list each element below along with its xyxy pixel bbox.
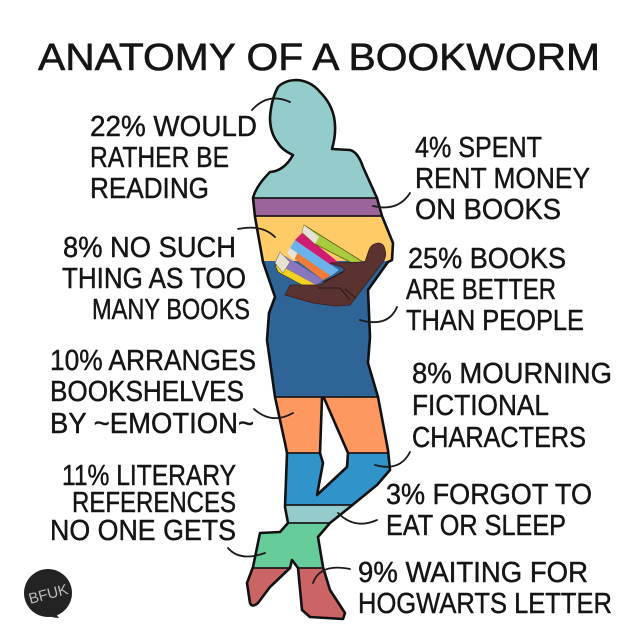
label: 8% mourning fictional characters: CHARACTERS xyxy=(412,422,586,454)
leader lines xyxy=(228,98,410,583)
label: 8% no such thing as too many books: MANY BOOKS xyxy=(92,294,250,326)
label: 10% arranges bookshelves by emotion: BOOKSHELVES xyxy=(50,376,244,408)
label: 9% waiting for hogwarts letter xyxy=(358,557,612,620)
logo: BFUK speech bubble: BFUK xyxy=(27,581,70,608)
label: 22% would rather be reading: READING xyxy=(90,173,209,205)
label: 4% spent rent money on books xyxy=(415,132,590,226)
label: 4% spent rent money on books: 4% SPENT xyxy=(415,132,542,164)
label: 25% books are better than people: ARE BETTER xyxy=(406,274,556,306)
icon: brown arm and hand xyxy=(285,243,386,306)
label: 8% no such thing as too many books xyxy=(62,232,250,326)
logo: BFUK speech bubble xyxy=(24,569,72,618)
label: 22% would rather be reading: RATHER BE xyxy=(90,142,229,174)
label: 11% literary references no one gets: 11% LITERARY xyxy=(62,460,236,492)
label: 9% waiting for hogwarts letter: HOGWARTS LETTER xyxy=(358,588,612,620)
label: 4% spent rent money on books: ON BOOKS xyxy=(415,194,561,226)
label: 10% arranges bookshelves by emotion: 10% ARRANGES xyxy=(50,345,256,377)
label: 25% books are better than people: THAN PEOPLE xyxy=(406,305,584,337)
label: 10% arranges bookshelves by emotion: BY ~EMOTION~ xyxy=(50,408,254,440)
label: 25% books are better than people xyxy=(406,243,584,337)
label: 22% would rather be reading xyxy=(90,111,257,205)
label: 3% forgot to eat or sleep: 3% FORGOT TO xyxy=(386,479,592,511)
label: 10% arranges bookshelves by emotion xyxy=(50,345,256,440)
label: 11% literary references no one gets xyxy=(50,460,236,547)
label: 8% no such thing as too many books: THING AS TOO xyxy=(62,263,246,295)
label: 4% spent rent money on books: RENT MONEY xyxy=(415,163,590,195)
label: 8% mourning fictional characters xyxy=(412,358,612,454)
label: 11% literary references no one gets: NO ONE GETS xyxy=(50,515,236,547)
label: 3% forgot to eat or sleep: EAT OR SLEEP xyxy=(386,510,566,542)
label: 25% books are better than people: 25% BOOKS xyxy=(408,243,566,275)
label: 8% mourning fictional characters: 8% MOURNING xyxy=(412,358,612,390)
label: 9% waiting for hogwarts letter: 9% WAITING FOR xyxy=(358,557,588,589)
icon: stack of books xyxy=(275,225,363,291)
silhouette outline xyxy=(247,80,393,619)
label: 8% mourning fictional characters: FICTIONAL xyxy=(412,390,549,422)
label: 11% literary references no one gets: REFERENCES xyxy=(72,487,236,519)
title: ANATOMY OF A BOOKWORM xyxy=(38,37,600,79)
colored body bands xyxy=(248,81,392,618)
label: 22% would rather be reading: 22% WOULD xyxy=(90,111,257,143)
figure: bookworm silhouette xyxy=(246,78,394,620)
label: 3% forgot to eat or sleep xyxy=(386,479,592,542)
label: 8% no such thing as too many books: 8% NO SUCH xyxy=(63,232,236,264)
